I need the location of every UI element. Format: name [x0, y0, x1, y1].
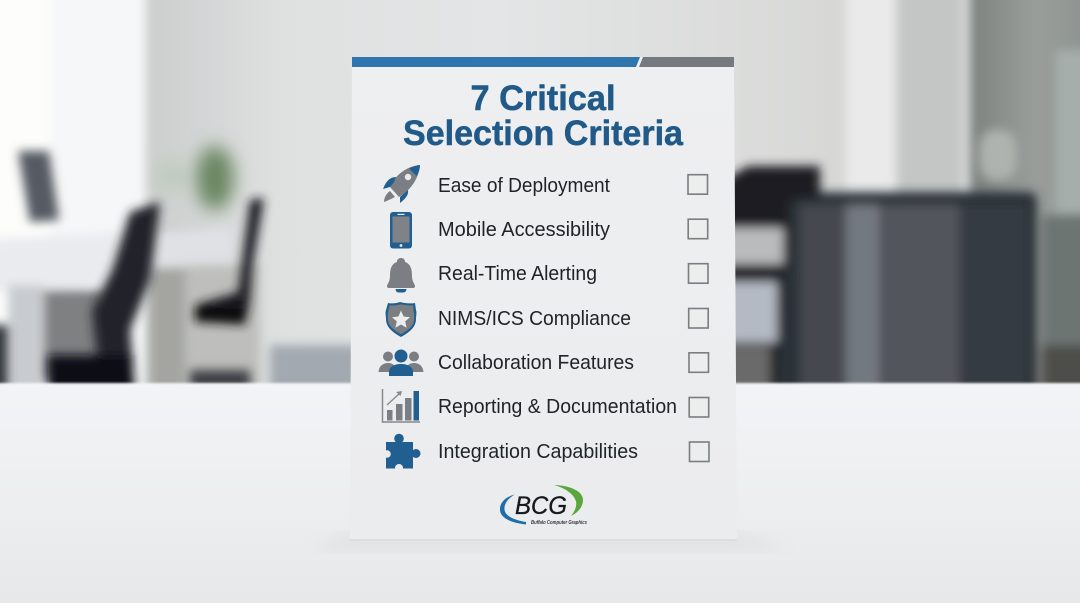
icon: rocket — [383, 165, 420, 203]
logo green swoosh — [554, 485, 583, 516]
icon: puzzle piece — [383, 434, 420, 472]
laptop and desks — [0, 151, 360, 395]
BCG logo — [500, 485, 587, 526]
logo tagline: Buffalo Computer Graphics — [531, 520, 587, 526]
checkbox — [690, 442, 709, 462]
criterion 2: mobile accessibility — [390, 212, 708, 248]
criterion 7: integration capabilities — [383, 434, 709, 472]
logo blue swoosh — [500, 494, 526, 524]
blurred office background — [0, 0, 1080, 400]
title: 7 Critical — [470, 79, 616, 118]
label: Collaboration Features — [438, 352, 634, 374]
label: Reporting & Documentation — [438, 396, 677, 418]
criterion 5: collaboration features — [378, 350, 708, 376]
checkbox — [689, 398, 709, 417]
card shadow — [310, 536, 790, 548]
criterion 6: reporting and documentation — [382, 389, 709, 422]
white table surface — [0, 383, 1080, 603]
label: Mobile Accessibility — [438, 219, 610, 241]
icon: smartphone — [390, 212, 412, 248]
icon: bar chart — [382, 389, 420, 422]
criterion 4: NIMS/ICS compliance — [386, 302, 708, 337]
plant — [158, 146, 234, 210]
icon: bell — [387, 258, 415, 293]
label: NIMS/ICS Compliance — [438, 308, 631, 330]
icon: shield badge — [386, 302, 416, 337]
label: Ease of Deployment — [438, 175, 610, 197]
top accent bar — [352, 57, 734, 67]
criterion 1: ease of deployment — [383, 165, 708, 203]
criterion 3: real-time alerting — [387, 258, 708, 293]
checkbox — [689, 308, 708, 328]
title line 2: Selection Criteria — [403, 114, 684, 153]
logo letters: BCG — [515, 492, 567, 520]
panel: criteria card — [350, 57, 737, 540]
label: Integration Capabilities — [438, 441, 638, 463]
office chairs — [0, 198, 264, 395]
checkbox — [688, 219, 708, 239]
checkbox — [688, 175, 708, 194]
right chairs and cabinet — [725, 166, 1080, 397]
checkbox — [688, 264, 708, 283]
label: Real-Time Alerting — [438, 263, 597, 285]
icon: team of people — [378, 350, 424, 376]
checkbox — [689, 353, 708, 372]
